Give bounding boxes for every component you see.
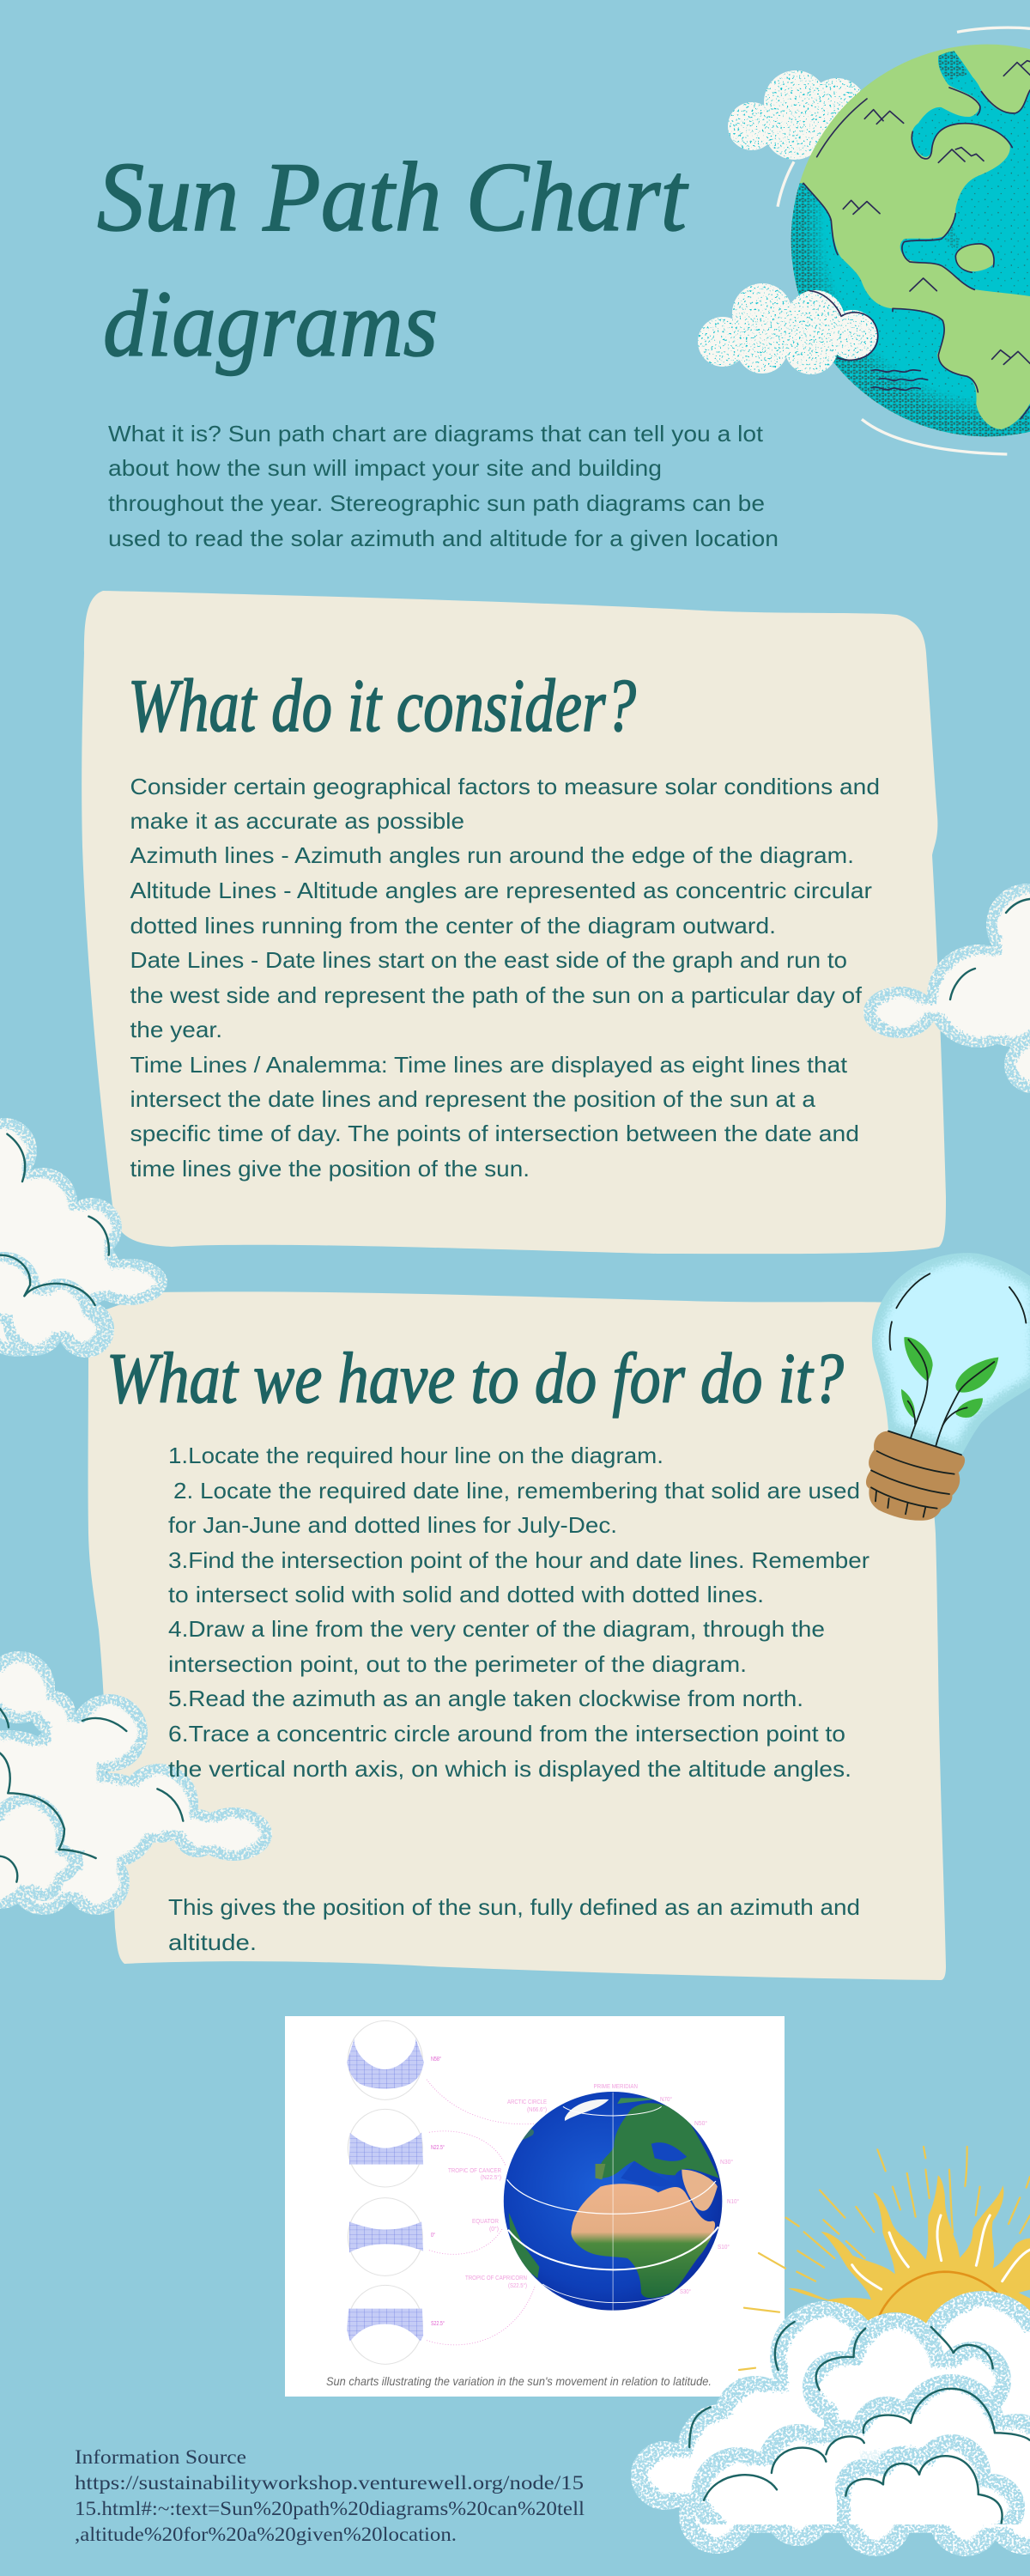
information source: [75, 2446, 585, 2545]
globe and chart labels: (S22.5°): [508, 2282, 527, 2289]
text block: what do it consider: [130, 774, 880, 1182]
globe and chart labels: ARCTIC CIRCLE: [507, 2099, 547, 2105]
text block: what do it consider: Date Lines - Date lines start on the east side of the graph and run to: [130, 947, 847, 973]
globe and chart labels: S30°: [680, 2288, 691, 2295]
intro text: What it is? Sun path chart are diagrams that can tell you a lot: [108, 421, 764, 447]
globe and chart labels: (0°): [489, 2226, 499, 2233]
cloud in front of globe: [698, 283, 877, 374]
globe and chart labels: N10°: [727, 2198, 739, 2205]
bulb glass: [872, 1253, 1030, 1455]
bulb base: [866, 1431, 965, 1521]
text block: steps: 1.Locate the required hour line on the diagram.: [168, 1443, 663, 1468]
globe: [504, 2092, 722, 2311]
orbit arcs: [778, 27, 1030, 454]
sun rays: [739, 2147, 1030, 2370]
sun flames: [788, 2175, 1030, 2333]
glass highlights: [896, 1273, 930, 1308]
text block: steps: to intersect solid with solid and dotted with dotted lines.: [168, 1582, 764, 1607]
globe and chart labels: N50°: [694, 2120, 707, 2127]
front cloud outline: [809, 291, 878, 360]
title: [97, 143, 689, 376]
globe and chart labels: PRIME MERIDIAN: [594, 2084, 638, 2090]
information source: 15.html#:~:text=Sun%20path%20diagrams%20can%20tell: [75, 2498, 585, 2519]
latitude lines: [507, 2093, 718, 2311]
text block: steps: 2. Locate the required date line, remembering that solid are used: [173, 1478, 860, 1504]
text block: steps: 5.Read the azimuth as an angle taken clockwise from north.: [168, 1686, 803, 1711]
icon: earth globe: [698, 26, 1030, 455]
globe and chart labels: TROPIC OF CAPRICORN: [465, 2275, 527, 2281]
globe and chart labels: (N22.5°): [481, 2174, 501, 2181]
stems: [908, 1340, 994, 1447]
heading: what we have to do: What we have to do for do it?: [106, 1339, 844, 1419]
text block: what do it consider: specific time of day. The points of intersection between the date and: [130, 1121, 859, 1146]
globe and chart labels: [431, 2056, 739, 2327]
text block: steps: intersection point, out to the perimeter of the diagram.: [168, 1651, 747, 1677]
globe and chart labels: EQUATOR: [472, 2219, 499, 2225]
intro text: [108, 421, 779, 551]
globe and chart labels: (N66.6°): [527, 2106, 547, 2113]
cloud inner arcs: [689, 2322, 1030, 2523]
information source: https://sustainabilityworkshop.venturewell.org/node/15: [75, 2472, 584, 2494]
cloud behind globe: [728, 70, 871, 160]
globe drawing: [772, 26, 1030, 455]
image caption: Sun charts illustrating the variation in the sun's movement in relation to latitude.: [326, 2374, 712, 2388]
cloud: middle right: [863, 884, 1030, 1093]
text block: steps: 6.Trace a concentric circle around from the intersection point to: [168, 1721, 845, 1747]
text block: steps: the vertical north axis, on which is displayed the altitude angles.: [168, 1756, 851, 1782]
text block: what do it consider: Azimuth lines - Azimuth angles run around the edge of the diagram.: [130, 842, 854, 868]
sun chart diagrams: [347, 2020, 424, 2364]
panel: what we have to do: [88, 1291, 946, 1980]
intro text: about how the sun will impact your site and building: [108, 455, 662, 481]
text block: what do it consider: make it as accurate as possible: [130, 808, 464, 834]
icon: light bulb with plant: [866, 1253, 1030, 1521]
globe and chart labels: S10°: [718, 2244, 730, 2251]
intro text: used to read the solar azimuth and altitude for a given location: [108, 526, 779, 551]
text block: what do it consider: Altitude Lines - Altitude angles are represented as concentric circular: [130, 878, 872, 903]
image: sun charts and globe: [285, 2016, 785, 2397]
base lines: [871, 1431, 961, 1517]
flame highlights: [852, 2215, 1030, 2289]
cloud: bottom right: [631, 2291, 1030, 2567]
globe and chart labels: N58°: [431, 2056, 441, 2063]
title: diagrams: [103, 271, 438, 376]
text block: steps: 4.Draw a line from the very center of the diagram, through the: [168, 1616, 825, 1642]
cloud: middle left: [0, 1118, 167, 1358]
text block: steps: for Jan-June and dotted lines for July-Dec.: [168, 1512, 617, 1538]
text block: steps: 3.Find the intersection point of the hour and date lines. Remember: [168, 1547, 869, 1573]
leaves: [901, 1337, 998, 1419]
heading: what do it consider: What do it consider?: [128, 665, 636, 748]
dotted connectors: [427, 2080, 536, 2345]
globe and chart labels: S22.5°: [431, 2320, 445, 2327]
sun disc arc: [878, 2272, 997, 2318]
text block: what do it consider: Consider certain geographical factors to measure solar conditions and: [130, 774, 880, 799]
title: Sun Path Chart: [97, 143, 689, 252]
panel: what do it consider: [82, 591, 946, 1254]
globe and chart labels: N22.5°: [431, 2144, 445, 2151]
text block: what do it consider: Time Lines / Analemma: Time lines are displayed as eight lines that: [130, 1052, 848, 1078]
text block: steps: This gives the position of the sun, fully defined as an azimuth and: [168, 1894, 860, 1920]
text block: steps: altitude.: [168, 1929, 257, 1955]
globe and chart labels: N30°: [720, 2159, 733, 2166]
text block: what do it consider: intersect the date lines and represent the position of the sun at a: [130, 1086, 816, 1112]
icon: sun behind clouds: [739, 2147, 1030, 2370]
text block: what do it consider: the year.: [130, 1017, 222, 1042]
globe outlines: [803, 61, 1030, 418]
text block: steps: [168, 1443, 869, 1955]
text block: what do it consider: the west side and represent the path of the sun on a particular day of: [130, 982, 863, 1008]
globe and chart labels: N70°: [660, 2096, 672, 2103]
text block: what do it consider: time lines give the position of the sun.: [130, 1156, 530, 1182]
globe and chart labels: TROPIC OF CANCER: [448, 2168, 501, 2174]
globe body: [791, 45, 1030, 436]
cloud: lower left: [0, 1651, 272, 1915]
text block: what do it consider: dotted lines running from the center of the diagram outward.: [130, 913, 776, 939]
intro text: throughout the year. Stereographic sun path diagrams can be: [108, 490, 765, 516]
information source: Information Source: [75, 2446, 246, 2468]
information source: ,altitude%20for%20a%20given%20location.: [75, 2524, 457, 2545]
globe and chart labels: 0°: [431, 2232, 435, 2239]
